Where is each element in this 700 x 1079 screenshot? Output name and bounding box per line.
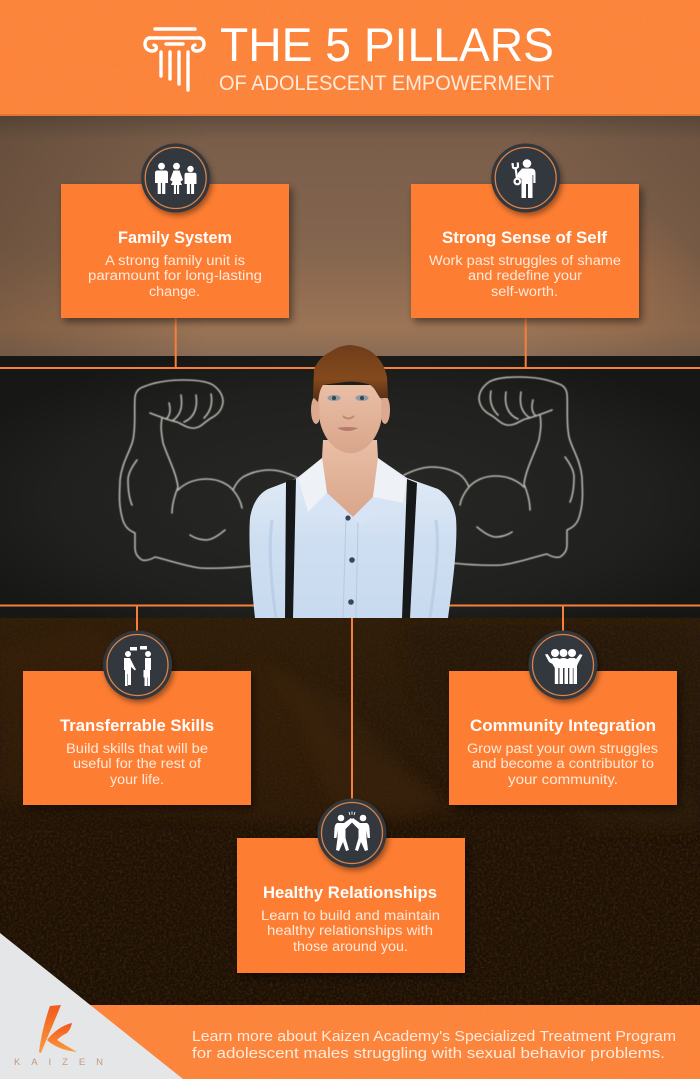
text: Family System description	[88, 253, 262, 299]
text: Healthy Relationships description: healthy relationships with	[267, 923, 433, 938]
heading: Community Integration: Community Integration	[470, 716, 656, 735]
chalk arm: right	[404, 377, 582, 565]
text: Transferrable Skills description: Build skills that will be	[66, 741, 208, 756]
shirt folds	[270, 520, 437, 618]
text: Transferrable Skills description: your life.	[110, 772, 164, 787]
icon: pillar	[145, 29, 204, 90]
background: dark mountain landscape	[0, 618, 700, 1008]
suspenders	[285, 479, 417, 618]
text: footer call to action	[192, 1029, 676, 1062]
neck	[322, 440, 378, 517]
face	[318, 385, 382, 453]
heading: Family System: Family System	[118, 228, 232, 247]
chalk arm: left	[120, 380, 298, 568]
panel: Strong Sense of Self	[411, 144, 639, 318]
text: Family System description: paramount for long-lasting	[88, 268, 262, 283]
text: Healthy Relationships description: Learn to build and maintain	[261, 908, 440, 923]
background: brown wall	[0, 116, 700, 356]
icon: high five	[318, 798, 386, 868]
text: Community Integration description: Grow past your own struggles	[467, 741, 658, 756]
text: Strong Sense of Self description	[429, 253, 621, 299]
icon: family	[141, 144, 210, 212]
shirt placket and buttons	[343, 515, 358, 618]
panel: Transferrable Skills	[23, 630, 251, 805]
background: chalkboard band	[0, 356, 700, 618]
subtitle: OF ADOLESCENT EMPOWERMENT	[219, 72, 554, 95]
text: Community Integration description: your community.	[508, 772, 618, 787]
panel: Community Integration	[449, 630, 677, 805]
icon: person with wrench	[491, 144, 560, 212]
panel: Healthy Relationships	[237, 798, 465, 973]
title: THE 5 PILLARS	[220, 18, 554, 71]
heading: Transferrable Skills: Transferrable Skills	[60, 716, 214, 735]
header banner	[0, 0, 700, 116]
collar	[298, 458, 407, 525]
text: Community Integration description: and become a contributor to	[472, 756, 654, 771]
text: Family System description: A strong family unit is	[105, 253, 245, 268]
text: Transferrable Skills description	[66, 741, 208, 787]
text: Kaizen wordmark: KAIZEN	[14, 1057, 103, 1068]
icon: two people talking	[103, 630, 172, 700]
text: Family System description: change.	[149, 284, 200, 299]
heading: Strong Sense of Self: Strong Sense of Self	[442, 228, 607, 247]
heading: Healthy Relationships: Healthy Relationships	[263, 883, 437, 902]
text: Community Integration description	[467, 741, 658, 787]
logo corner: Kaizen	[0, 933, 183, 1079]
photo: teen with suspenders	[249, 345, 456, 618]
eyes, nose, mouth	[328, 395, 368, 431]
text: Strong Sense of Self description: Work past struggles of shame	[429, 253, 621, 268]
text: footer call to action: for adolescent males struggling with sexual behavior problems.	[192, 1046, 665, 1062]
ears	[311, 396, 390, 424]
text: Healthy Relationships description	[261, 908, 440, 954]
footer banner	[0, 1005, 700, 1079]
title	[219, 18, 554, 95]
text: footer call to action: Learn more about Kaizen Academy's Specialized Treatment Program	[192, 1029, 676, 1045]
icon: group of friends	[528, 630, 598, 700]
connector lines	[0, 318, 700, 805]
hair	[313, 345, 388, 402]
panel: Family System	[61, 144, 289, 318]
text: Strong Sense of Self description: and redefine your	[468, 268, 583, 283]
text: Transferrable Skills description: useful for the rest of	[73, 756, 201, 771]
chalk drawing: flexed arms	[120, 377, 582, 568]
shirt	[249, 458, 456, 618]
text: Healthy Relationships description: those around you.	[293, 939, 408, 954]
icon: Kaizen k mark	[39, 1005, 77, 1053]
text: Strong Sense of Self description: self-worth.	[491, 284, 558, 299]
